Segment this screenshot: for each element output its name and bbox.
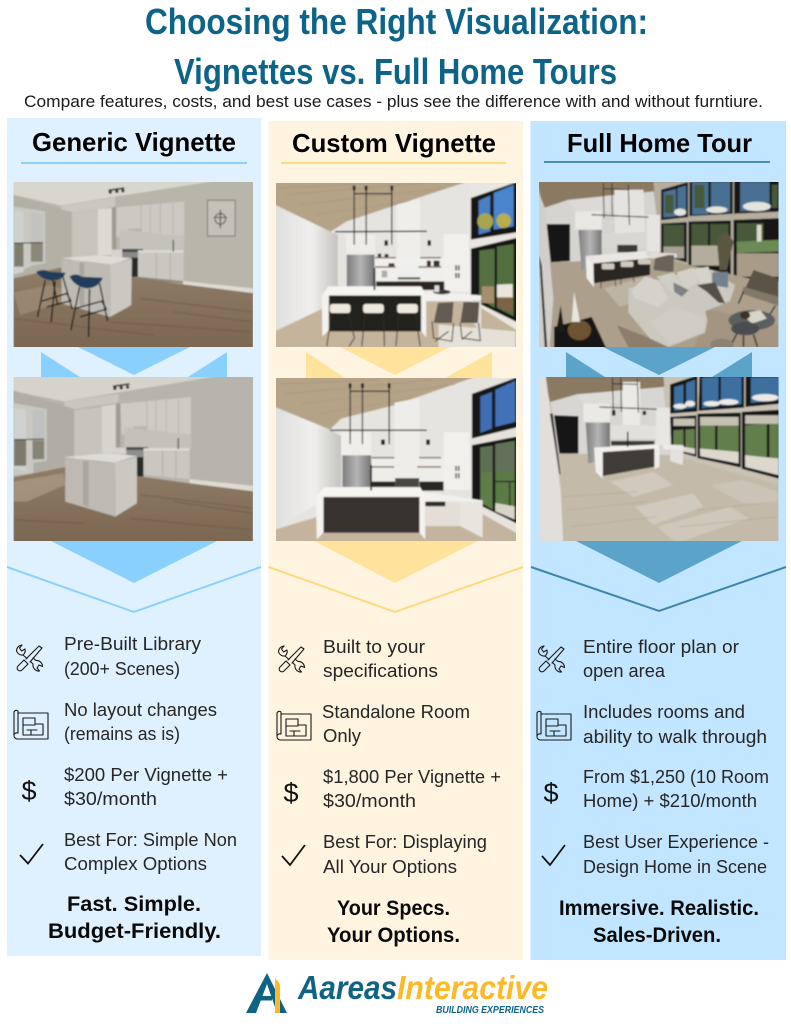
wordmark: [297, 969, 548, 1016]
photo: full home tour furnished: [539, 182, 778, 347]
feature list: custom vignette: [277, 637, 501, 877]
text: best for: Complex Options: [64, 854, 207, 874]
icon: dollar sign: $: [543, 778, 559, 808]
icon: crossed tools: [278, 646, 305, 672]
heading: custom vignette: Custom Vignette: [292, 128, 496, 158]
tagline: custom vignette: Your Specs.: [337, 897, 450, 920]
photo: generic vignette furnished: [14, 182, 253, 347]
text: library: (200+ Scenes): [64, 659, 180, 679]
title: [145, 1, 648, 92]
text: layout: (remains as is): [64, 724, 180, 744]
title: Choosing the Right Visualization:: [145, 1, 648, 42]
tagline: generic vignette: Fast. Simple.: [67, 893, 201, 916]
text: price: $30/month: [64, 789, 157, 809]
text: standalone room: [322, 702, 470, 746]
text: rooms: ability to walk through: [583, 727, 767, 747]
icon: blueprint: [537, 711, 571, 740]
text: best for: [64, 830, 237, 874]
text: standalone room: Only: [323, 726, 361, 746]
text: best for: All Your Options: [323, 857, 457, 877]
icon: crossed tools: [16, 645, 43, 671]
icon: blueprint: [277, 711, 311, 740]
title: Vignettes vs. Full Home Tours: [174, 51, 617, 92]
tagline: full home tour: Immersive. Realistic.: [559, 897, 759, 920]
chevron arrow between photos: [41, 347, 227, 377]
text: specifications: specifications: [323, 661, 438, 681]
text: best for: Best For: Simple Non: [64, 830, 237, 850]
text: price: $1,800 Per Vignette +: [323, 767, 501, 787]
subtitle: Compare features, costs, and best use cases - plus see the difference with and without furntiure.: [24, 92, 763, 111]
text: specifications: [323, 637, 438, 681]
chevron arrow between photos: [566, 347, 752, 377]
text: price: [583, 767, 769, 811]
text: best user experience: Design Home in Scene: [583, 857, 767, 877]
tagline: full home tour: Sales-Driven.: [593, 924, 721, 947]
panel: full home tour: [530, 121, 786, 960]
chevron divider line: [7, 567, 261, 612]
heading: generic vignette: Generic Vignette: [32, 127, 236, 157]
photo: generic vignette unfurnished: [14, 377, 253, 541]
icon: crossed tools: [538, 646, 565, 672]
icon: dollar sign: $: [21, 776, 37, 806]
text: floor plan: [583, 637, 739, 681]
icon: blueprint: [14, 710, 48, 739]
tagline: custom vignette: [327, 897, 460, 947]
wordmark: BUILDING EXPERIENCES: [436, 1004, 544, 1016]
feature list: full home tour: [537, 637, 769, 877]
icon: check mark: [542, 845, 565, 865]
text: best for: [323, 832, 487, 877]
photo: custom vignette unfurnished: [276, 378, 516, 541]
text: price: Home) + $210/month: [583, 791, 757, 811]
panel: custom vignette: [268, 121, 523, 960]
panel: generic vignette: [7, 118, 261, 956]
text: best for: Best For: Displaying: [323, 832, 487, 852]
text: price: $200 Per Vignette +: [64, 765, 228, 785]
chevron arrow below photos: [576, 541, 742, 583]
tagline: generic vignette: Budget-Friendly.: [48, 920, 221, 943]
photo: full home tour unfurnished: [539, 377, 778, 541]
chevron arrow below photos: [51, 541, 217, 583]
icon: check mark: [20, 844, 43, 864]
feature list: generic vignette: [14, 634, 237, 874]
text: specifications: Built to your: [323, 637, 425, 657]
chevron arrow between photos: [306, 347, 492, 378]
logo: Aareas Interactive: [246, 969, 548, 1016]
wordmark: Interactive: [397, 969, 548, 1006]
text: floor plan: open area: [583, 661, 666, 681]
text: standalone room: Standalone Room: [322, 702, 470, 722]
text: floor plan: Entire floor plan or: [583, 637, 739, 657]
heading: full home tour: Full Home Tour: [567, 128, 752, 158]
text: price: From $1,250 (10 Room: [583, 767, 769, 787]
text: price: [323, 767, 501, 811]
tagline: custom vignette: Your Options.: [327, 924, 460, 947]
tagline: generic vignette: [48, 893, 221, 943]
text: best user experience: [583, 832, 769, 877]
chevron divider line: [531, 567, 786, 611]
icon: logo mark: [246, 973, 287, 1013]
text: library: [64, 634, 201, 679]
text: layout: [64, 700, 217, 744]
text: library: Pre-Built Library: [64, 634, 201, 654]
text: rooms: [583, 702, 767, 747]
photo: custom vignette furnished: [276, 183, 516, 347]
text: best user experience: Best User Experience -: [583, 832, 769, 852]
text: layout: No layout changes: [64, 700, 217, 720]
chevron divider line: [268, 567, 523, 612]
tagline: full home tour: [559, 897, 759, 947]
chevron arrow below photos: [314, 541, 478, 583]
text: rooms: Includes rooms and: [583, 702, 745, 722]
text: price: [64, 765, 228, 809]
text: price: $30/month: [323, 791, 416, 811]
icon: dollar sign: $: [283, 778, 299, 808]
icon: check mark: [282, 845, 305, 865]
wordmark: Aareas: [297, 969, 397, 1006]
